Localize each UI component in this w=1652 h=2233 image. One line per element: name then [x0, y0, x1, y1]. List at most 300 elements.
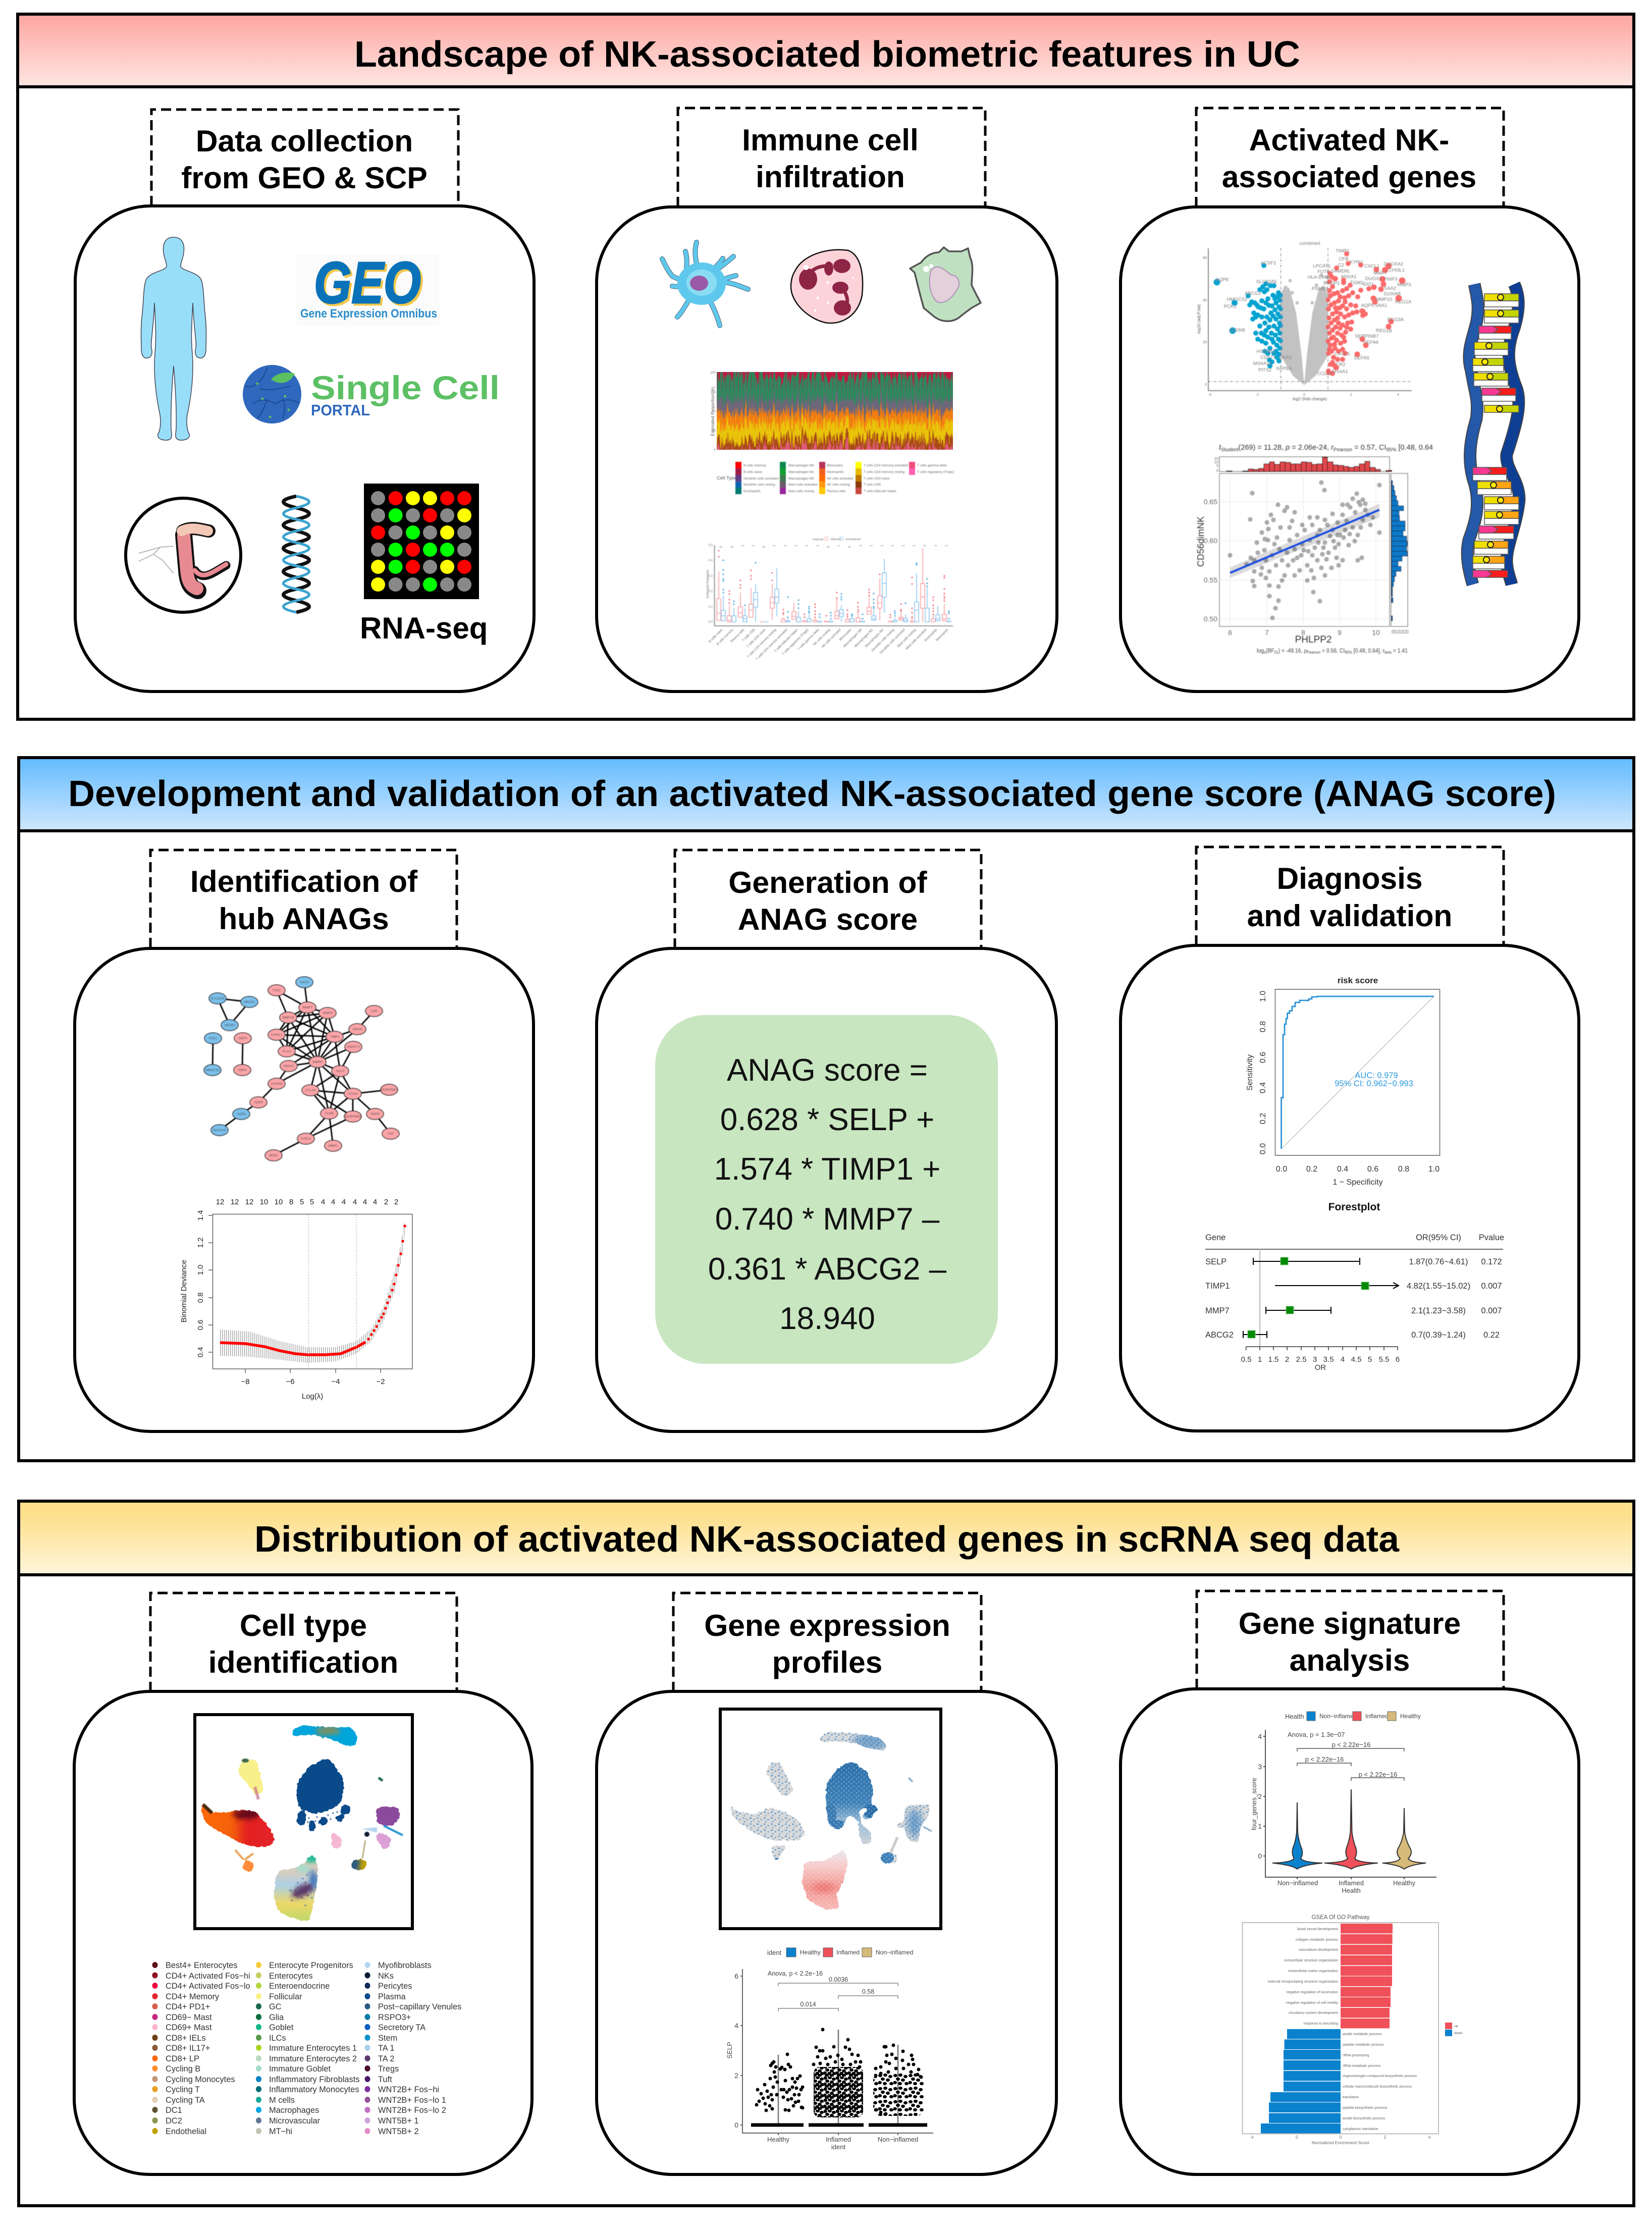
- legend: cell types: CD4+ Activated Fos−hi: [166, 1972, 250, 1981]
- chart legend: cell type: T cells CD8: [864, 483, 881, 487]
- bar chart: GSEA of GO pathway: peptide metabolic process: [1343, 2043, 1384, 2047]
- forest plot: 3: [1313, 1355, 1317, 1364]
- box plot: immune cell fractions: Macrophages M0: [843, 628, 863, 648]
- chart legend: cell type: T cells regulatory (Tregs): [917, 470, 954, 474]
- gene network: PDPN: [370, 1112, 380, 1116]
- panel: immune cell infiltration: [597, 207, 1057, 692]
- tab: gene signature analysis: analysis: [1290, 1643, 1410, 1677]
- chart legend: cell type: Mast cells resting: [788, 490, 814, 493]
- box plot: immune cell fractions: 0.5: [709, 544, 713, 547]
- ROC curve: 1.0: [1259, 991, 1267, 1002]
- bar chart: GSEA of GO pathway: peptide biosynthetic process: [1343, 2106, 1388, 2110]
- panel: ANAG score formula: [597, 948, 1056, 1431]
- stacked bar chart: cell proportions: 75: [712, 390, 716, 394]
- volcano plot: HMGCS2: [1227, 297, 1247, 302]
- gene network: PCK1: [209, 1037, 218, 1040]
- volcano plot: MS4A1: [1332, 369, 1348, 375]
- bar chart: GSEA of GO pathway: external encapsulating structure organization: [1268, 1980, 1338, 1984]
- legend: cell types: CD69+ Mast: [166, 2023, 212, 2032]
- LASSO deviance plot: 5: [300, 1198, 304, 1206]
- volcano plot: LPCAT1: [1313, 263, 1331, 269]
- forest plot: 1.5: [1268, 1355, 1278, 1364]
- box plot: immune cell fractions: ***: [784, 545, 787, 548]
- legend: cell types: Plasma: [378, 1992, 406, 2001]
- chart legend: cell type: [717, 462, 954, 494]
- chart legend: cell type: Macrophages M1: [788, 470, 814, 474]
- forest plot: 0.7(0.39~1.24): [1411, 1331, 1466, 1340]
- correlation scatter plot: 0.55: [1204, 576, 1217, 584]
- box plot: immune cell fractions: Plasma cells: [730, 628, 745, 644]
- legend: cell types: Enterocyte Progenitors: [269, 1961, 353, 1970]
- gene network: SRGN: [353, 1028, 362, 1031]
- gene network: ANXG: [300, 981, 309, 984]
- box plot: immune cell fractions: ***: [870, 545, 873, 548]
- volcano plot: DKK2: [1280, 355, 1292, 360]
- volcano plot: [1197, 241, 1412, 401]
- LASSO deviance plot: 10: [275, 1198, 283, 1206]
- box plot: immune cell fractions: inflamed: [830, 538, 841, 541]
- jitter plot: SELP expression: 2: [734, 2071, 738, 2080]
- box plot: immune cell fractions: ***: [859, 545, 862, 548]
- jitter plot: SELP expression: 0.0036: [829, 1976, 848, 1983]
- gene network: SERPINB3: [345, 1115, 361, 1119]
- jitter plot: SELP expression: 4: [734, 2022, 738, 2030]
- volcano plot: SLC22A5: [1256, 279, 1276, 285]
- icon: neutrophil: [791, 250, 863, 323]
- correlation scatter plot: Pearson: [1307, 650, 1320, 655]
- icon: colon biopsy: [126, 498, 241, 612]
- volcano plot: PITX2: [1258, 367, 1271, 373]
- formula box: 0.740 * MMP7 –: [715, 1202, 940, 1237]
- forest plot: 0.22: [1483, 1331, 1500, 1340]
- tab: gene expression profiles: [673, 1593, 981, 1692]
- bar chart: GSEA of GO pathway: response to wounding: [1303, 2022, 1338, 2026]
- ROC curve: 0.4: [1337, 1165, 1348, 1174]
- bar chart: GSEA of GO pathway: -4: [1250, 2135, 1254, 2140]
- gene network: SLC22A5: [210, 997, 225, 1000]
- volcano plot: TGM2: [1350, 280, 1363, 286]
- gene network: MMP3: [323, 1012, 333, 1015]
- volcano plot: CXCL1: [1364, 263, 1379, 269]
- tab: generation of ANAG score: [675, 850, 981, 948]
- LASSO deviance plot: −8: [241, 1377, 250, 1386]
- legend: cell types: MT−hi: [269, 2127, 292, 2136]
- legend: cell types: Stem: [378, 2034, 397, 2043]
- box plot: immune cell fractions: Mast cells activated: [905, 628, 928, 651]
- LASSO deviance plot: 0.4: [196, 1347, 205, 1357]
- tab: gene signature analysis: Gene signature: [1239, 1606, 1461, 1640]
- tab: activated NK-associated genes: Activated NK-: [1249, 123, 1449, 157]
- legend: cell types: CD4+ Activated Fos−lo: [166, 1982, 250, 1991]
- bar chart: GSEA of GO pathway: cellular macromolecule biosynthetic process: [1343, 2085, 1412, 2089]
- tab: cell type identification: identification: [208, 1645, 398, 1679]
- LASSO deviance plot: Binomial Deviance: [180, 1260, 188, 1322]
- panel: cell type identification: [74, 1691, 532, 2174]
- legend: cell types: Enterocytes: [269, 1972, 313, 1981]
- chart legend: cell type: T cells CD4 naive: [864, 477, 890, 481]
- forest plot: 4: [1341, 1355, 1345, 1364]
- jitter plot: SELP expression: 6: [734, 1972, 738, 1980]
- box plot: immune cell fractions: Macrophages M2: [865, 628, 885, 648]
- LASSO deviance plot: 2: [384, 1198, 388, 1206]
- box plot: immune cell fractions: NK cells resting: [813, 628, 831, 647]
- LASSO deviance plot: 5: [310, 1198, 314, 1206]
- ROC curve: 0.0: [1276, 1165, 1287, 1174]
- chart legend: cell type: NK cells resting: [827, 483, 850, 487]
- volcano plot: TNIP3: [1384, 277, 1397, 282]
- correlation scatter plot: = 0.57, CI: [1352, 444, 1386, 452]
- forest plot: Gene: [1205, 1233, 1225, 1242]
- box plot: immune cell fractions: Eosinophils: [924, 628, 938, 643]
- violin plot: four genes score: Anova, p = 1.3e−07: [1288, 1731, 1345, 1738]
- correlation scatter plot: [0.48, 0.64: [1396, 444, 1433, 452]
- violin plot: four genes score: 1: [1258, 1822, 1262, 1830]
- logo: GEO: GEO: [316, 252, 423, 317]
- LASSO deviance plot: 0.6: [196, 1320, 205, 1330]
- forest plot: [1205, 1201, 1504, 1372]
- correlation scatter plot: = 0.56, CI: [1320, 648, 1345, 654]
- violin plot: four genes score: Healthy: [1393, 1879, 1416, 1887]
- forest plot: 1.87(0.76~4.61): [1409, 1257, 1468, 1266]
- tab: generation of ANAG score: Generation of: [728, 865, 927, 899]
- tab: immune cell infiltration: Immune cell: [742, 123, 919, 157]
- volcano plot: ANXA1: [1341, 274, 1357, 280]
- ROC curve: AUC: 0.979: [1355, 1071, 1398, 1080]
- LASSO deviance plot: Log(λ): [302, 1392, 323, 1401]
- correlation scatter plot: 7: [1265, 628, 1269, 636]
- correlation scatter plot: log: [1257, 648, 1264, 654]
- volcano plot: CFB: [1339, 256, 1349, 262]
- correlation scatter plot: Student: [1221, 447, 1239, 453]
- tab: identification of hub ANAGs: hub ANAGs: [219, 901, 389, 936]
- legend: cell types: Post−capillary Venules: [378, 2002, 461, 2011]
- volcano plot: TIMP1: [1336, 248, 1350, 254]
- ROC curve: 0.6: [1259, 1052, 1267, 1063]
- section 2: development and validation of ANAG score: [19, 758, 1634, 1461]
- legend: cell types: TA 2: [378, 2054, 395, 2063]
- box plot: immune cell fractions: mygroup: [813, 538, 823, 541]
- ROC curve: risk score: [1338, 976, 1378, 985]
- correlation scatter plot: [0.48, 0.64], r: [1352, 648, 1384, 654]
- correlation scatter plot: ) = -49.16, ρ: [1278, 648, 1307, 654]
- panel: data sources: [75, 206, 534, 692]
- box plot: immune cell fractions: Monocytes: [839, 628, 852, 642]
- box plot: immune cell fractions: T cells CD4 naive: [746, 628, 767, 649]
- chart legend: cell type: T cells CD4 memory resting: [864, 470, 905, 474]
- bar chart: GSEA of GO pathway: [1243, 1915, 1463, 2145]
- icon: RNA-seq microarray: RNA-seq: [360, 611, 488, 645]
- forest plot: 0.007: [1481, 1282, 1502, 1291]
- legend: cell types: Myofibroblasts: [378, 1961, 432, 1970]
- formula box: 0.361 * ABCG2 –: [708, 1252, 947, 1287]
- legend: cell types: RSPO3+: [378, 2013, 411, 2022]
- box plot: immune cell fractions: Dendritic cells resting: [871, 628, 895, 652]
- forest plot: OR: [1315, 1363, 1326, 1372]
- LASSO deviance plot: −6: [286, 1377, 295, 1386]
- legend: cell types: Inflammatory Monocytes: [269, 2085, 359, 2094]
- jitter plot: SELP expression: 0: [734, 2121, 738, 2129]
- correlation scatter plot: 10: [1214, 460, 1218, 464]
- logo: GEO: Gene Expression Omnibus: [300, 307, 437, 321]
- jitter plot: SELP expression: 0.014: [800, 2001, 816, 2008]
- jitter plot: SELP expression: Inflamed: [826, 2136, 851, 2143]
- gene network: C1R: [370, 1009, 378, 1013]
- forest plot: 0.007: [1481, 1306, 1502, 1315]
- section 3 title: Distribution of activated NK-associated genes in scRNA seq data: [254, 1519, 1400, 1560]
- legend: cell types: WNT5B+ 1: [378, 2116, 419, 2125]
- box plot: immune cell fractions: Macrophages M1: [854, 628, 874, 648]
- box plot: immune cell fractions: T cells regulatory (Tregs): [781, 628, 809, 656]
- volcano plot: SAA1: [1375, 303, 1387, 308]
- volcano plot: REG3A: [1388, 317, 1404, 323]
- forest plot: SELP: [1205, 1257, 1227, 1266]
- tab: data collection: [151, 110, 458, 206]
- volcano plot: MS4A12: [1253, 361, 1271, 366]
- volcano plot: 60: [1203, 256, 1207, 260]
- formula box: 0.628 * SELP +: [720, 1102, 934, 1137]
- ROC curve: 1 − Specificity: [1333, 1178, 1383, 1187]
- box plot: immune cell fractions: ***: [923, 545, 926, 548]
- forest plot: 4.5: [1351, 1355, 1361, 1364]
- correlation scatter plot: PHLPP2: [1295, 634, 1331, 645]
- box plot: immune cell fractions: ***: [934, 545, 937, 548]
- legend: cell types: [152, 1961, 461, 2136]
- formula box: 18.940: [779, 1301, 875, 1336]
- legend: ident: Inflamed: [836, 1949, 860, 1956]
- gene network: PLAU: [283, 1050, 291, 1053]
- legend: cell types: Immature Enterocytes 1: [269, 2044, 357, 2053]
- volcano plot: SERPINB7: [1355, 334, 1379, 339]
- box plot: immune cell fractions: ns: [730, 546, 733, 549]
- UMAP: cell types: [195, 1715, 412, 1929]
- legend: health: Healthy: [1400, 1713, 1421, 1720]
- correlation scatter plot: 0.65: [1204, 498, 1217, 506]
- legend: cell types: WNT2B+ Fos−lo 2: [378, 2106, 446, 2115]
- violin plot: four genes score: 2: [1258, 1792, 1262, 1800]
- jitter plot: SELP expression: Anova, p < 2.2e−16: [768, 1970, 823, 1977]
- box plot: immune cell fractions: 0.1: [709, 606, 713, 609]
- legend: cell types: Glia: [269, 2013, 284, 2022]
- ROC curve: 0.8: [1259, 1021, 1267, 1032]
- legend: cell types: GC: [269, 2002, 282, 2011]
- correlation scatter plot: 8: [1301, 628, 1305, 636]
- correlation scatter plot: 5: [1216, 463, 1218, 468]
- chart legend: cell type: Dendritic cells activated: [743, 477, 779, 481]
- tab: immune cell infiltration: [678, 108, 985, 207]
- ROC curve: 0.6: [1367, 1165, 1378, 1174]
- bar chart: GSEA of GO pathway: GSEA Of GO Pathway: [1311, 1915, 1370, 1921]
- LASSO deviance plot: 8: [289, 1198, 293, 1206]
- icon: DNA ribbon: [1467, 284, 1519, 584]
- stacked bar chart: cell proportions: Estimated Proportion(%): [710, 387, 715, 436]
- box plot: immune cell fractions: 0.2: [709, 590, 713, 593]
- violin plot: four genes score: [1250, 1730, 1436, 1894]
- correlation scatter plot: 95%: [1386, 447, 1397, 453]
- bar chart: GSEA of GO pathway: negative regulation of locomotion: [1286, 1991, 1338, 1994]
- LASSO deviance plot: −4: [331, 1377, 340, 1386]
- correlation scatter plot: [1196, 444, 1433, 655]
- volcano plot: AQP9: [1361, 303, 1374, 308]
- tab: diagnosis and validation: [1196, 847, 1504, 945]
- ROC curve: 0.2: [1259, 1113, 1267, 1124]
- gene network: FCRL5: [301, 1137, 311, 1141]
- box plot: immune cell fractions: ***: [805, 545, 808, 548]
- jitter plot: SELP expression: Healthy: [767, 2136, 790, 2143]
- tab: identification of hub ANAGs: Identification of: [190, 864, 418, 898]
- LASSO deviance plot: 4: [353, 1198, 357, 1206]
- gene network: AQP8: [237, 1112, 246, 1116]
- box plot: immune cell fractions: ***: [741, 545, 744, 548]
- legend: cell types: TA 1: [378, 2044, 395, 2053]
- gene network: CTLA4: [305, 1089, 315, 1092]
- legend: cell types: CD4+ Memory: [166, 1992, 220, 2001]
- correlation scatter plot: (269) = 11.28,: [1239, 444, 1286, 452]
- gene network: MMP9: [313, 1060, 323, 1064]
- icon: RNA-seq microarray: [360, 484, 488, 645]
- LASSO deviance plot: 1.4: [196, 1210, 205, 1220]
- volcano plot: CD177: [1260, 355, 1275, 360]
- volcano plot: CR2: [1336, 362, 1346, 367]
- bar chart: GSEA of GO pathway: extracellular structure organization: [1284, 1959, 1338, 1962]
- logo: Single Cell Portal: Single Cell: [311, 369, 500, 406]
- gene network: ABCG2: [244, 1000, 255, 1004]
- legend: cell types: WNT2B+ Fos−lo 1: [378, 2096, 446, 2105]
- forest plot: 4.82(1.55~15.02): [1407, 1282, 1470, 1291]
- tab: activated NK-associated genes: associated genes: [1222, 160, 1476, 194]
- volcano plot: CXCL5: [1335, 351, 1350, 357]
- box plot: immune cell fractions: Estimated Proportion: [707, 570, 710, 598]
- correlation scatter plot: t: [1219, 444, 1221, 452]
- legend: cell types: Pericytes: [378, 1982, 412, 1991]
- volcano plot: CLDN8: [1229, 328, 1245, 333]
- volcano plot: S100A8: [1383, 291, 1401, 297]
- correlation scatter plot: (BF: [1266, 648, 1274, 654]
- panel: diagnosis and validation: [1121, 945, 1579, 1431]
- box plot: immune cell fractions: ***: [752, 545, 755, 548]
- volcano plot: MMP7: [1373, 271, 1388, 276]
- legend: cell types: Inflammatory Fibroblasts: [269, 2075, 359, 2084]
- forest plot: MMP7: [1205, 1306, 1230, 1315]
- correlation scatter plot: 01: [1274, 650, 1278, 655]
- gene network: TIMP1: [330, 1035, 340, 1039]
- tab: immune cell infiltration: infiltration: [756, 160, 905, 194]
- legend: cell types: Immature Enterocytes 2: [269, 2054, 357, 2063]
- logo: Single Cell Portal: PORTAL: [311, 401, 370, 419]
- correlation scatter plot: 0.50: [1204, 615, 1217, 623]
- jitter plot: SELP expression: 0.58: [862, 1988, 874, 1995]
- correlation scatter plot: 10: [1372, 628, 1380, 636]
- box plot: immune cell fractions: ***: [945, 545, 948, 548]
- chart legend: cell type: T cells follicular helper: [864, 490, 897, 493]
- volcano plot: REG1B: [1376, 328, 1392, 334]
- bar chart: GSEA of GO pathway: translation: [1343, 2096, 1359, 2099]
- section 1: landscape of NK-associated features: [18, 14, 1634, 719]
- correlation scatter plot: 6: [1228, 628, 1232, 636]
- volcano plot: 0: [1205, 383, 1207, 387]
- LASSO deviance plot: 4: [373, 1198, 377, 1206]
- box plot: immune cell fractions: ***: [773, 545, 776, 548]
- stacked bar chart: cell proportions: 25: [712, 429, 716, 433]
- volcano plot: 40: [1203, 299, 1207, 302]
- legend: cell types: Macrophages: [269, 2106, 319, 2115]
- gene network: MMP7: [303, 1006, 312, 1009]
- box plot: immune cell fractions: ns: [719, 546, 722, 549]
- correlation scatter plot: 20: [1214, 456, 1218, 461]
- box plot: immune cell fractions: Neutrophils: [935, 628, 949, 642]
- bar chart: GSEA of GO pathway: -2: [1294, 2135, 1298, 2140]
- panel: hub genes: [75, 948, 534, 1431]
- volcano plot: KYNU: [1350, 259, 1363, 265]
- gene network: [204, 977, 399, 1161]
- jitter plot: SELP expression: [726, 1969, 933, 2151]
- volcano plot: 0: [1303, 393, 1305, 397]
- LASSO deviance plot: 4: [331, 1198, 335, 1206]
- bar chart: GSEA of GO pathway: organonitrogen compound biosynthetic process: [1343, 2075, 1417, 2078]
- LASSO deviance plot: 10: [260, 1198, 268, 1206]
- stacked bar chart: cell proportions: [711, 371, 953, 451]
- gene network: ANGPT2: [347, 1045, 360, 1049]
- gene network: GBP5: [238, 1037, 247, 1040]
- legend: cell types: ILCs: [269, 2034, 286, 2043]
- forest plot: TIMP1: [1205, 1282, 1230, 1291]
- legend: cell types: WNT5B+ 2: [378, 2127, 419, 2136]
- panel: activated NK-associated genes: [1121, 207, 1579, 692]
- box plot: immune cell fractions: B cells memory: [716, 628, 734, 646]
- forest plot: OR(95% CI): [1416, 1233, 1461, 1242]
- gene network: S100A8: [271, 1082, 283, 1086]
- chart legend: cell type: T cells gamma delta: [917, 464, 947, 467]
- legend: cell types: Endothelial: [166, 2127, 206, 2136]
- volcano plot: HLA-DMB: [1308, 275, 1329, 280]
- volcano plot: NXPE4: [1276, 366, 1292, 371]
- bar chart: GSEA of GO pathway: circulatory system development: [1289, 2011, 1338, 2015]
- box plot: immune cell fractions: ***: [880, 545, 883, 548]
- gene network: MMP1B: [282, 1016, 294, 1020]
- gene network: CHI3L1: [271, 1033, 282, 1037]
- stacked bar chart: cell proportions: 50: [712, 410, 716, 413]
- box plot: immune cell fractions: T cells CD4 memory activated: [755, 628, 788, 661]
- ROC curve: Sensitivity: [1246, 1054, 1254, 1091]
- box plot: immune cell fractions: **: [838, 545, 840, 548]
- forest plot: 2: [1285, 1355, 1289, 1364]
- box plot: immune cell fractions: Mast cells resting: [897, 628, 917, 648]
- icon: human body: [141, 237, 206, 440]
- stacked bar chart: cell proportions: 0: [714, 448, 716, 452]
- legend: ident: Healthy: [800, 1949, 821, 1956]
- section 3: distribution in scRNA-seq data: [19, 1501, 1634, 2206]
- correlation scatter plot: CD56dimNK: [1196, 516, 1206, 567]
- volcano plot: MMP3: [1397, 282, 1411, 288]
- bar chart: GSEA of GO pathway: vasculature development: [1299, 1948, 1338, 1952]
- chart legend: cell type: Cell Type: [717, 475, 736, 481]
- bar chart: GSEA of GO pathway: cytoplasmic translation: [1343, 2128, 1378, 2131]
- legend: ident: [767, 1948, 913, 1957]
- legend: cell types: Follicular: [269, 1992, 302, 2001]
- volcano plot: DUOX2: [1365, 276, 1381, 282]
- icon: DNA helix: [284, 496, 309, 612]
- formula box: 1.574 * TIMP1 +: [714, 1152, 940, 1187]
- volcano plot: AQP8: [1215, 277, 1229, 283]
- panel: gene expression profiles: [597, 1691, 1056, 2174]
- volcano plot: 20: [1203, 341, 1207, 344]
- forest plot: 2.5: [1296, 1355, 1306, 1364]
- gene network: SELP: [336, 1070, 344, 1073]
- forest plot: 6: [1396, 1355, 1400, 1364]
- formula box: ANAG score =: [727, 1053, 928, 1088]
- legend: cell types: Tregs: [378, 2064, 399, 2074]
- box plot: immune cell fractions: ns: [848, 546, 851, 549]
- stacked bar chart: cell proportions: 100: [710, 371, 716, 375]
